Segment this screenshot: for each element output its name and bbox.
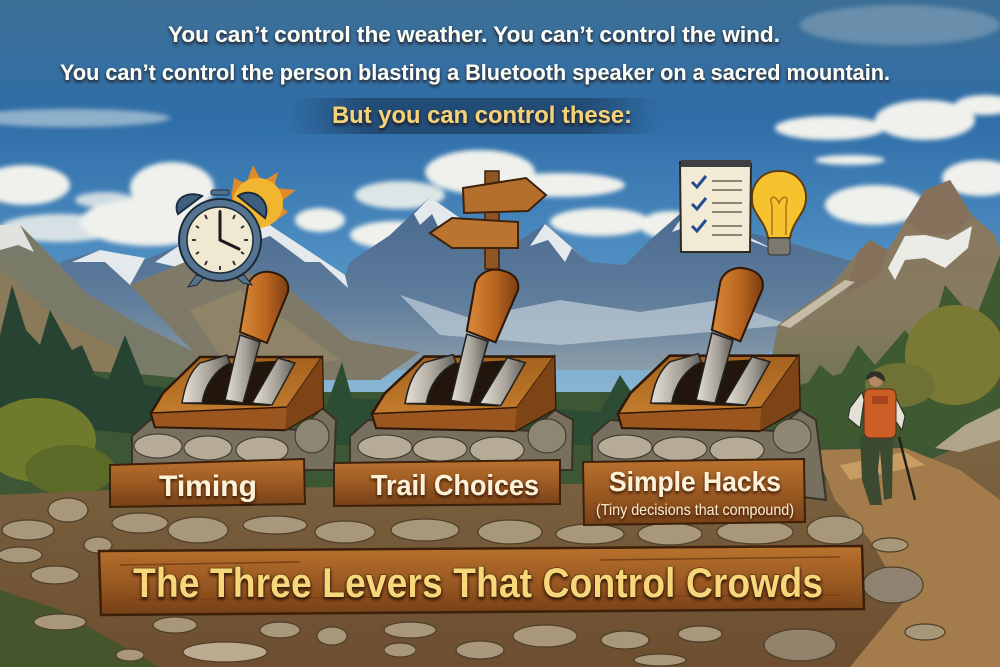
label: trail choices xyxy=(334,460,560,506)
stone base xyxy=(132,408,336,470)
title plank: The Three Levers That Control Crowds xyxy=(133,559,823,606)
wooden box and lever xyxy=(618,268,799,431)
foreground ground xyxy=(0,408,1000,667)
lever plates xyxy=(182,355,295,405)
label: timing: Timing xyxy=(159,470,257,503)
stone base xyxy=(350,410,573,470)
stone base xyxy=(592,410,826,500)
wooden box xyxy=(151,357,323,430)
callout: but you can control these: But you can control these: xyxy=(332,102,632,129)
foreground stones xyxy=(0,498,945,666)
intro text: You can’t control the person blasting a Bluetooth speaker on a sacred mountain. xyxy=(60,60,890,85)
icon: light bulb xyxy=(752,171,806,255)
lever arm and handle xyxy=(225,272,288,403)
side mountains xyxy=(0,180,1000,420)
label: simple hacks xyxy=(583,459,805,525)
icon: alarm clock and sun xyxy=(177,165,296,287)
title plank xyxy=(99,546,864,615)
wooden box and lever xyxy=(372,270,555,431)
lever 1: timing xyxy=(132,272,336,470)
sky background xyxy=(0,0,1000,400)
label: trail choices: Trail Choices xyxy=(371,470,539,502)
label: simple hacks: Simple Hacks xyxy=(609,466,781,497)
intro text: You can’t control the weather. You can’t control the wind. xyxy=(168,22,780,47)
label: simple hacks: (Tiny decisions that compound) xyxy=(596,502,794,519)
callout: but you can control these xyxy=(290,98,660,134)
far mountain range xyxy=(60,197,860,370)
icon: checklist notepad xyxy=(680,160,751,252)
tree line xyxy=(0,255,1000,520)
icon: wooden signpost xyxy=(430,171,546,269)
clouds xyxy=(0,5,1000,249)
lever 3: simple hacks xyxy=(592,268,826,500)
intro text xyxy=(60,22,890,85)
hiker xyxy=(848,371,915,505)
lever 2: trail choices xyxy=(350,270,573,470)
label: timing xyxy=(110,459,305,507)
